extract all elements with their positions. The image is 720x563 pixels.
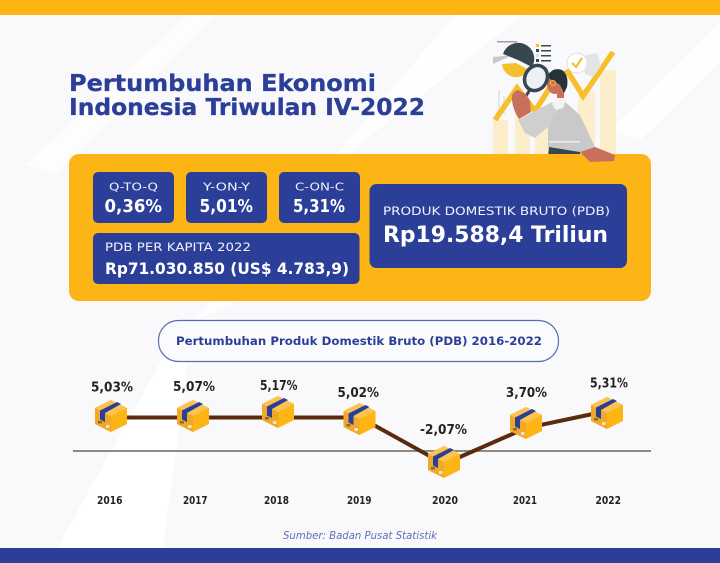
title	[69, 69, 425, 121]
card: C-ON-C: C-ON-C	[295, 180, 344, 194]
data point: 2016	[91, 380, 133, 507]
card: PDB per kapita: Rp71.030.850 (US$ 4.783,9)	[105, 259, 349, 278]
data point: 2016: 2016	[97, 495, 122, 507]
data point: 2019: 2019	[347, 495, 372, 507]
data point: 2022: 5,31%	[590, 376, 628, 392]
data point: 2016: 5,03%	[91, 380, 133, 396]
chart heading pill	[158, 320, 558, 362]
data point: 2021: 2021	[513, 495, 537, 507]
data point: 2018	[260, 379, 298, 507]
data point: 2020	[420, 423, 467, 507]
data point: 2017	[173, 380, 215, 507]
card: PDB total: Rp19.588,4 Triliun	[383, 223, 608, 248]
bottom bar	[0, 548, 720, 563]
data point: 2017: 2017	[183, 495, 208, 507]
card: PDB total	[370, 184, 627, 268]
data point: 2022	[590, 376, 628, 507]
title: Pertumbuhan Ekonomi	[69, 69, 376, 97]
icon: resting hand	[580, 147, 615, 162]
card: C-ON-C: 5,31%	[293, 196, 345, 217]
card: Q-TO-Q: Q-TO-Q	[109, 180, 158, 194]
chart heading pill: Pertumbuhan Produk Domestik Bruto (PDB) 2016-2022	[176, 334, 542, 348]
card: Y-ON-Y: Y-ON-Y	[202, 180, 250, 194]
data point: 2021	[506, 386, 547, 507]
data point: 2018: 2018	[264, 495, 289, 507]
data point: 2019: 5,02%	[338, 386, 379, 401]
card: Q-TO-Q	[93, 172, 174, 223]
card: Y-ON-Y: 5,01%	[200, 196, 253, 217]
card: Y-ON-Y	[186, 172, 267, 223]
card: PDB total: PRODUK DOMESTIK BRUTO (PDB)	[383, 204, 610, 218]
line chart: PDB growth 2016-2022	[73, 376, 651, 507]
data point: 2021: 3,70%	[506, 386, 547, 401]
card: C-ON-C	[279, 172, 360, 223]
data point: 2020: -2,07%	[420, 423, 467, 438]
data point: 2022: 2022	[596, 495, 621, 507]
panel: key figures	[69, 154, 651, 301]
top bar	[0, 0, 720, 15]
source note: Sumber: Badan Pusat Statistik	[283, 530, 438, 542]
illustration: analyst with magnifier	[493, 41, 616, 156]
card: Q-TO-Q: 0,36%	[104, 196, 162, 217]
title: Indonesia Triwulan IV-2022	[69, 93, 425, 121]
data point: 2019	[338, 386, 379, 507]
data point: 2017: 5,07%	[173, 380, 215, 395]
card: PDB per kapita	[93, 233, 360, 284]
data point: 2020: 2020	[432, 495, 458, 507]
card: PDB per kapita: PDB PER KAPITA 2022	[105, 240, 251, 254]
data point: 2018: 5,17%	[260, 379, 298, 394]
